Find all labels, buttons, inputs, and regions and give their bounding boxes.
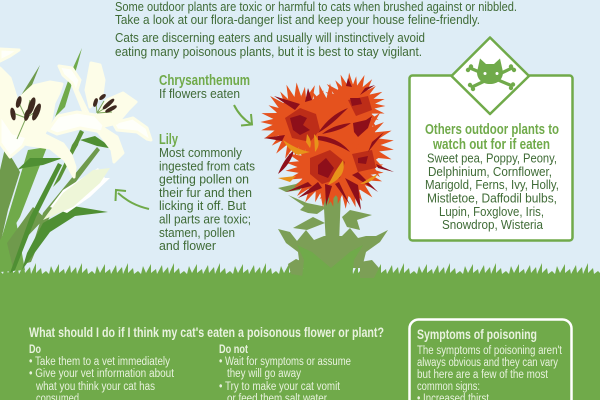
panel heading: watch out for if eaten [432,137,550,153]
illustration: chrysanthemum plant [260,72,398,278]
label: lily: their fur and then [159,186,252,200]
plant list: Snowdrop, Wisteria [442,218,543,232]
panel: symptoms of poisoning [410,320,572,400]
left lily flower [0,49,75,177]
plant list [425,152,559,232]
intro text: Some outdoor plants are toxic or harmful to cats when brushed against or nibbled. [115,0,517,14]
symptoms text: always obvious and they can vary [417,357,558,369]
symptoms text: common signs: [417,381,480,393]
plant list: Marigold, Ferns, Ivy, Holly, [425,178,559,192]
section: what to do [29,324,384,400]
plant list: Sweet pea, Poppy, Peony, [427,152,557,166]
label: lily: licking it off. But [159,199,247,213]
label: lily [159,132,255,253]
chrysanthemum stem and leaves [278,178,388,278]
label: chrysanthemum: If flowers eaten [159,87,240,101]
do list [29,344,175,400]
lily bud [43,168,110,220]
lily leaves and stems [0,48,114,273]
plant list: Delphinium, Cornflower, [428,165,552,179]
do list: Do [29,344,41,356]
chrysanthemum flower hearts [285,96,376,184]
left lily stamens [10,96,42,139]
label: lily: and flower [159,239,216,253]
panel: other outdoor plants [410,38,572,240]
do list: what you think your cat has [35,381,155,393]
symptoms text: but here are a few of the most [417,369,549,381]
intro text: eating many poisonous plants, but it is best to stay vigilant. [115,45,422,59]
plant list: Mistletoe, Daffodil bulbs, [427,192,557,206]
intro text [115,0,517,59]
grass ground [0,262,600,400]
right lily flower [48,63,151,162]
intro text: Take a look at our flora-danger list and keep your house feline-friendly. [115,13,480,27]
panel heading [425,122,559,153]
do not list [219,344,351,400]
do not list: • Try to make your cat vomit [219,381,341,393]
label: chrysanthemum: Chrysanthemum [159,73,250,89]
label: lily: ingested from cats [159,160,255,174]
arrow: to lily [116,190,149,209]
do not list: • Wait for symptoms or assume [219,356,351,368]
icon: cat and crossbones in diamond [452,38,529,114]
illustration: lily plant [0,48,151,273]
do not list: Do not [219,344,248,356]
label: lily: Lily [159,132,178,148]
chrysanthemum dark details [264,78,394,210]
label: lily: all parts are toxic; [159,212,251,226]
panel heading: Others outdoor plants to [425,122,559,138]
plant list: Lupin, Foxglove, Iris, [439,205,544,219]
intro text: Cats are discerning eaters and usually will instinctively avoid [115,31,425,45]
do not list: they will go away [227,368,301,380]
chrysanthemum petals [260,72,398,213]
label: lily: stamen, pollen [159,226,235,240]
heading: What should I do if I think my cat's eaten a poisonous flower or plant? [29,324,384,340]
label: lily: getting pollen on [159,172,249,186]
arrow: to chrysanthemum [234,105,252,126]
symptoms text [417,345,563,400]
do list: • Take them to a vet immediately [29,356,170,368]
symptoms heading: Symptoms of poisoning [417,326,537,342]
do list: • Give your vet information about [29,368,175,380]
symptoms text: The symptoms of poisoning aren't [417,345,563,357]
right lily stamens [93,94,117,113]
chrysanthemum orange highlights [278,134,378,185]
label: lily: Most commonly [159,146,243,160]
label: chrysanthemum [159,73,250,101]
